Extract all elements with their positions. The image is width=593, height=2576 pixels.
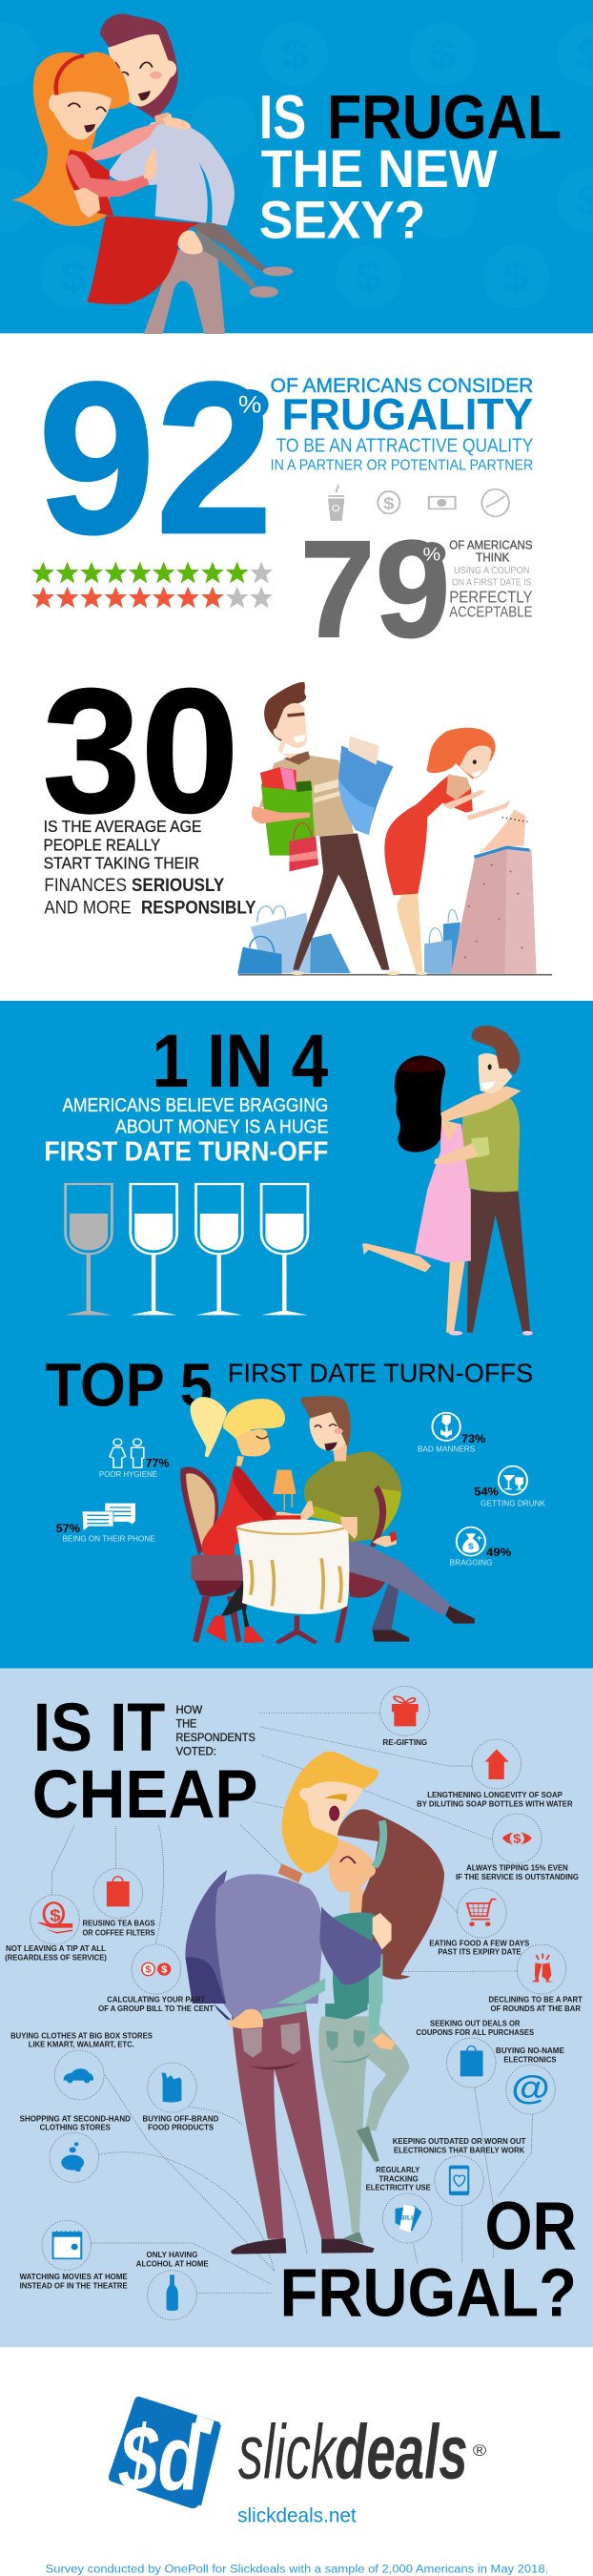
item: eating expired food — [429, 1888, 529, 1957]
item: reusing tea bags: REUSING TEA BAGS — [82, 1919, 155, 1928]
item: seeking deals: COUPONS FOR ALL PURCHASES — [416, 2028, 534, 2038]
item: re-gifting: RE-GIFTING — [382, 1738, 427, 1748]
heading: top 5 — [46, 1350, 533, 1419]
item: tracking electricity: BILL — [400, 2215, 416, 2221]
item: big box stores: LIKE KMART, WALMART, ETC. — [29, 2040, 134, 2049]
heading: is it cheap — [32, 1689, 258, 1832]
heading: is it cheap: CHEAP — [32, 1755, 258, 1832]
item: no-name electronics: @ — [511, 2069, 550, 2107]
title: is frugal the new sexy: THE NEW — [261, 139, 498, 198]
item: off-brand food — [143, 2063, 218, 2132]
panel: hero title: $ — [429, 32, 456, 78]
item: off-brand food: BUYING OFF-BRAND — [143, 2114, 218, 2124]
labels: carried-over item text: OF A GROUP BILL TO THE CENT — [98, 2005, 214, 2014]
stat: poor hygiene: POOR HYGIENE — [99, 1470, 157, 1479]
title: is frugal the new sexy — [259, 83, 562, 249]
item: not leaving a tip — [5, 1895, 107, 1963]
item: calculating your part: $ — [145, 1964, 152, 1975]
title: is frugal the new sexy: IS — [259, 83, 306, 153]
big number 30: 30 — [42, 653, 239, 850]
heading: or frugal — [280, 2188, 577, 2331]
item: reusing tea bags — [82, 1868, 155, 1938]
stat: bragging: BRAGGING — [450, 1558, 492, 1567]
illustration: shoe on pedestal — [451, 809, 536, 974]
item: reusing tea bags: OR COFFEE FILTERS — [82, 1928, 155, 1938]
big number 79 percent: 79 — [300, 511, 450, 666]
panel: hero title: $ — [281, 32, 309, 78]
text: bragging statement: AMERICANS BELIEVE BRAGGING — [62, 1093, 328, 1116]
logo: slickdeals mark: $d — [118, 2407, 202, 2510]
connector lines: frugal items — [92, 2075, 533, 2293]
item: second-hand clothing — [20, 2114, 131, 2182]
stat: poor hygiene — [99, 1439, 170, 1479]
panel: 92 percent statistics — [31, 337, 533, 666]
item: not leaving a tip: $ — [50, 1907, 61, 1925]
item: outdated electronics: KEEPING OUTDATED OR WORN OUT — [393, 2137, 526, 2147]
text: coupon statement: ACCEPTABLE — [449, 603, 533, 620]
item: big box stores — [10, 2031, 153, 2100]
item: big box stores: BUYING CLOTHES AT BIG BOX STORES — [10, 2031, 153, 2041]
illustration: shopping bags on the floor — [237, 905, 552, 975]
item: eating expired food: EATING FOOD A FEW DAYS — [429, 1939, 529, 1948]
star rating: eight of ten red — [31, 587, 273, 608]
stat: being on their phone: 57% — [56, 1522, 80, 1535]
item: second-hand clothing: SHOPPING AT SECOND-HAND — [20, 2114, 131, 2124]
text: average age statement: SERIOUSLY — [132, 875, 224, 896]
panel: hero title: $ — [60, 255, 88, 301]
text: frugality statement: FRUGALITY — [282, 389, 533, 439]
stat: being on their phone: BEING ON THEIR PHONE — [62, 1534, 155, 1543]
text: average age statement — [44, 818, 256, 918]
text: bragging statement: FIRST DATE TURN-OFF — [44, 1136, 328, 1167]
panel: is it cheap or frugal, lower half — [0, 2004, 593, 2338]
stat: bad manners — [418, 1413, 486, 1453]
panel: is it cheap or frugal, upper half — [0, 1669, 593, 2006]
logo: slickdeals mark — [109, 2397, 221, 2510]
text: average age statement: PEOPLE REALLY — [44, 836, 160, 855]
text: average age statement: RESPONSIBLY — [141, 897, 256, 918]
stat: getting drunk — [474, 1466, 545, 1507]
item: alcohol at home — [136, 2251, 209, 2320]
text: average age statement: START TAKING THEIR — [44, 854, 199, 873]
stat: bad manners: 73% — [461, 1432, 486, 1445]
item: calculating your part: $ — [161, 1964, 167, 1975]
panel: top 5 first date turn-offs — [0, 1336, 593, 1669]
text: coupon statement: PERFECTLY — [449, 588, 533, 607]
item: always tipping — [456, 1814, 579, 1882]
stat: bad manners: BAD MANNERS — [418, 1444, 475, 1453]
stat: bragging: $ — [468, 1542, 474, 1551]
heading: is it cheap: IS IT — [33, 1689, 165, 1765]
panel: hero title: $ — [355, 255, 382, 301]
text: bragging statement: ABOUT MONEY IS A HUGE — [115, 1115, 328, 1137]
item: alcohol at home: ONLY HAVING — [147, 2251, 197, 2260]
labels: carried-over item text — [98, 2005, 581, 2014]
item: no-name electronics: BUYING NO-NAME — [496, 2046, 564, 2056]
connector lines: cheap items — [51, 1714, 518, 1972]
item: alcohol at home: ALCOHOL AT HOME — [136, 2259, 209, 2269]
logo: slickdeals wordmark: slick — [238, 2409, 338, 2495]
icon: gray wine glass — [66, 1184, 112, 1315]
panel: 1 in 4 first date turn-off — [0, 1001, 593, 1336]
item: outdated electronics — [393, 2137, 526, 2206]
heading: 1 in 4: 1 IN 4 — [152, 1019, 329, 1103]
item: no-name electronics — [496, 2046, 564, 2114]
text: average age statement: FINANCES — [44, 875, 127, 896]
item: re-gifting — [380, 1686, 429, 1748]
item: not leaving a tip: NOT LEAVING A TIP AT ALL — [6, 1944, 106, 1954]
item: eating expired food: PAST ITS EXPIRY DATE — [438, 1947, 521, 1957]
big number 92 percent: 92 — [38, 337, 273, 579]
illustration: kissing couple upper body — [185, 1752, 444, 2006]
item: no-name electronics: ELECTRONICS — [503, 2055, 557, 2065]
icon: white wine glass 2 — [195, 1184, 242, 1315]
text: coupon statement: OF AMERICANS — [449, 538, 533, 551]
icon: white wine glass 3 — [261, 1184, 308, 1315]
text: how the respondents voted: THE — [175, 1717, 196, 1730]
illustration: hugging couple — [362, 1026, 533, 1336]
text: survey source: Survey conducted by OnePoll for Slickdeals with a sample of 2,000 Americans in May 2018. — [46, 2563, 548, 2575]
text: how the respondents voted: VOTED: — [175, 1744, 216, 1757]
text: coupon statement: THINK — [476, 551, 510, 564]
item: off-brand food: FOOD PRODUCTS — [148, 2123, 214, 2132]
stat: bragging — [450, 1527, 512, 1567]
item: not leaving a tip: (REGARDLESS OF SERVICE) — [5, 1953, 107, 1963]
text: average age statement: IS THE AVERAGE AGE — [44, 818, 201, 837]
text: bragging statement — [44, 1093, 328, 1167]
item: tracking electricity — [366, 2166, 432, 2243]
stat: getting drunk: 54% — [474, 1485, 499, 1498]
item: movies at home: INSTEAD OF IN THE THEATRE — [20, 2281, 128, 2291]
item: calculating your part — [107, 1944, 205, 2005]
text: how the respondents voted: RESPONDENTS — [175, 1731, 256, 1744]
panel: hero title: $ — [502, 255, 530, 301]
icon: white wine glass 1 — [131, 1184, 177, 1315]
big number 79 percent: % — [422, 544, 440, 565]
stat: being on their phone — [56, 1504, 155, 1543]
illustration: couple lower body — [214, 2004, 409, 2254]
star rating: nine of ten green — [31, 562, 273, 583]
item: calculating your part: CALCULATING YOUR PART — [107, 1995, 205, 2005]
item: seeking deals: SEEKING OUT DEALS OR — [430, 2019, 521, 2028]
text: average age statement: AND MORE — [44, 897, 132, 918]
illustration: man with shopping bags — [252, 682, 400, 975]
panel: hero title — [0, 0, 593, 334]
item: tracking electricity: ELECTRICITY USE — [366, 2183, 431, 2192]
item: outdated electronics: ELECTRONICS THAT BARELY WORK — [394, 2146, 524, 2155]
logo: slickdeals wordmark: deals — [335, 2409, 468, 2495]
icons: coffee, coin, bill, clock: $ — [383, 495, 395, 513]
text: coupon statement: USING A COUPON — [454, 566, 529, 576]
text: frugality statement — [271, 374, 533, 473]
item: tracking electricity: TRACKING — [378, 2174, 419, 2184]
item: lengthening longevity of soap — [417, 1739, 573, 1809]
logo: slickdeals wordmark: ® — [473, 2441, 486, 2459]
heading: top 5: TOP 5 — [46, 1350, 213, 1419]
panel: footer with logo — [0, 2337, 593, 2575]
item: seeking deals — [416, 2019, 534, 2088]
illustration: embracing couple — [11, 14, 293, 334]
illustration: couple at dinner table — [180, 1396, 475, 1644]
stat: poor hygiene: 77% — [146, 1457, 170, 1469]
panel: average age 30 — [42, 653, 552, 975]
text: how the respondents voted — [175, 1703, 256, 1757]
band: end of light blue section — [0, 2337, 593, 2347]
stat: bragging: 49% — [486, 1546, 512, 1559]
item: movies at home: WATCHING MOVIES AT HOME — [20, 2273, 128, 2282]
title: is frugal the new sexy: SEXY? — [259, 190, 425, 249]
item: movies at home — [20, 2220, 128, 2291]
big number 92 percent: % — [238, 391, 262, 418]
text: how the respondents voted: HOW — [175, 1703, 203, 1716]
text: coupon statement — [449, 538, 533, 620]
illustration: woman looking at shoe — [384, 728, 511, 975]
item: second-hand clothing: CLOTHING STORES — [40, 2123, 111, 2132]
item: always tipping: $ — [513, 1832, 521, 1845]
text: coupon statement: ON A FIRST DATE IS — [452, 577, 532, 588]
item: declining rounds — [489, 1944, 583, 2005]
text: website: slickdeals.net — [237, 2504, 357, 2527]
icons: coffee, coin, bill, clock — [328, 485, 509, 520]
stat: getting drunk: GETTING DRUNK — [481, 1499, 545, 1507]
heading: top 5: FIRST DATE TURN-OFFS — [228, 1358, 533, 1388]
text: frugality statement: OF AMERICANS CONSIDER — [271, 374, 533, 397]
item: tracking electricity: REGULARLY — [376, 2166, 420, 2175]
